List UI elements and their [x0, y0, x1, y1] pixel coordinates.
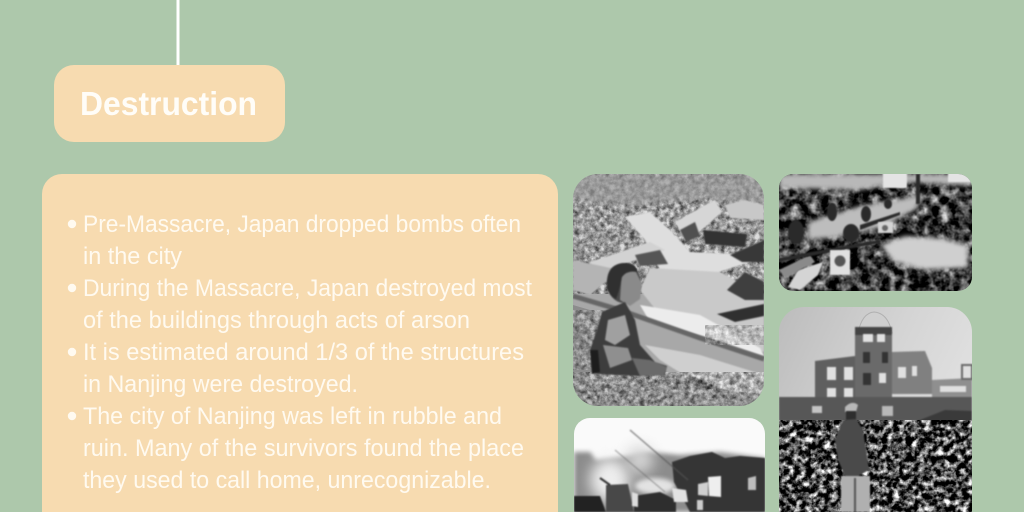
dark houses: [574, 430, 765, 512]
panel: destruction text: [42, 174, 558, 512]
bullet 4: ruin. Many of the survivors found the place: [83, 435, 524, 462]
ground: [573, 305, 764, 406]
bullet 3: [68, 339, 524, 398]
photo: dome ruin and man viewing rubble: [779, 307, 972, 512]
bullet 1: in the city: [83, 243, 183, 270]
smoke and distant houses: [574, 452, 765, 512]
rail: [573, 296, 764, 359]
building: [779, 326, 972, 420]
photo: burning city: [574, 418, 765, 512]
bullet 2: During the Massacre, Japan destroyed most: [83, 275, 532, 302]
bullet 2: [68, 275, 532, 334]
bullet 4: The city of Nanjing was left in rubble and: [83, 403, 502, 430]
bullet 2: of the buildings through acts of arson: [83, 307, 470, 334]
heading: Destruction: Destruction: [80, 85, 257, 122]
bullet 4: [68, 403, 524, 494]
bullet 1: Pre-Massacre, Japan dropped bombs often: [83, 211, 521, 238]
bullet 4: they used to call home, unrecognizable.: [83, 467, 491, 494]
child: [590, 263, 667, 376]
sheets of metal: [573, 200, 764, 395]
rubble: [779, 420, 972, 512]
photo: child sitting in rubble: [573, 174, 764, 406]
bullet 3: It is estimated around 1/3 of the structures: [83, 339, 524, 366]
photo: soldiers and flags among ruins: [779, 172, 972, 291]
figures: [779, 174, 920, 262]
dark wreckage: [635, 222, 764, 397]
bullet 3: in Nanjing were destroyed.: [83, 371, 358, 398]
man: [835, 403, 870, 512]
connector line: [176, 0, 180, 66]
flags: [830, 222, 893, 275]
dome: [858, 312, 892, 333]
heading: Destruction: [54, 65, 285, 142]
bullet 1: [68, 211, 521, 270]
